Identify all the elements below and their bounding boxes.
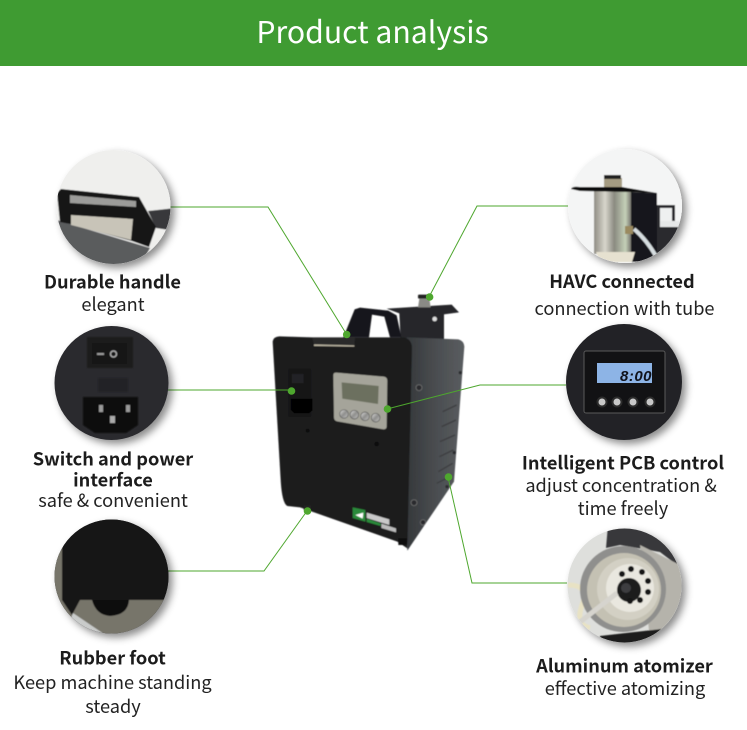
circle photo: handle — [50, 145, 180, 275]
connector line: atomizer — [445, 473, 567, 583]
caption: rubber foot: steady — [85, 693, 141, 719]
caption: aluminum atomizer: effective atomizing — [545, 675, 705, 701]
front panel — [273, 336, 412, 548]
bracket — [387, 305, 459, 341]
circle photo: PCB control — [566, 324, 682, 440]
caption: switch and power: safe & convenient — [38, 487, 188, 513]
vents — [437, 405, 457, 483]
caption: aluminum atomizer: Aluminum atomizer — [535, 652, 713, 678]
connector line: durable handle — [170, 207, 351, 338]
caption: HAVC connected: connection with tube — [534, 295, 715, 321]
control panel — [333, 373, 387, 429]
caption: rubber foot: Rubber foot — [59, 644, 166, 670]
circle photo: switch and power — [54, 326, 168, 440]
connector line: PCB — [384, 385, 566, 413]
caption: switch and power: Switch and power — [33, 446, 193, 472]
connector line: switch and power — [168, 387, 295, 395]
caption: HAVC connected — [534, 268, 715, 321]
switch and power socket — [288, 369, 311, 417]
circle photo: aluminum atomizer — [568, 525, 690, 650]
handle — [343, 308, 401, 337]
connector line: rubber foot — [168, 507, 311, 571]
caption: durable handle — [44, 268, 181, 317]
caption: intelligent PCB control: time freely — [578, 495, 669, 521]
header banner — [0, 0, 747, 66]
title: Product analysis — [256, 8, 489, 52]
product photo: scent machine — [273, 295, 464, 551]
caption: switch and power: interface — [73, 466, 153, 492]
caption: intelligent PCB control: adjust concentration & — [525, 472, 717, 498]
tube fitting — [418, 299, 431, 307]
lcd readout: 8:00 — [620, 368, 652, 385]
screws — [416, 385, 422, 391]
logo — [353, 507, 365, 522]
caption: durable handle: elegant — [81, 291, 145, 317]
caption: HAVC connected: HAVC connected — [549, 268, 695, 294]
foot — [304, 505, 311, 510]
circle photo: HAVC connector — [565, 145, 690, 270]
handle recess — [312, 338, 355, 346]
caption: switch and power — [33, 446, 193, 513]
connector line: HAVC — [426, 206, 568, 301]
caption: durable handle: Durable handle — [44, 268, 181, 294]
caption: intelligent PCB control — [522, 450, 724, 521]
side panel — [407, 337, 464, 551]
caption: rubber foot: Keep machine standing — [13, 669, 212, 695]
caption: aluminum atomizer — [535, 652, 713, 701]
caption: intelligent PCB control: Intelligent PCB control — [522, 450, 724, 476]
circle photo: rubber foot — [50, 515, 175, 645]
caption: rubber foot — [13, 644, 212, 719]
